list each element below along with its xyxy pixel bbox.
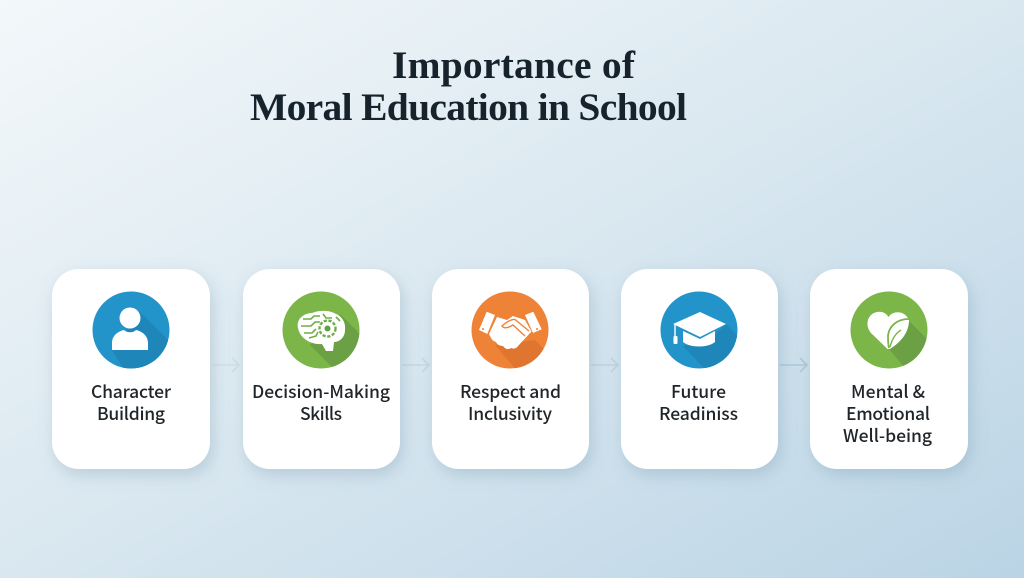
icon: graduation cap (660, 292, 738, 368)
title (250, 43, 687, 129)
title: Importance of (392, 43, 636, 87)
panel: character building (52, 269, 210, 469)
label: decision-making skills: Decision-Making (252, 379, 390, 404)
label: future readiness: Future (671, 379, 726, 404)
label: character building: Character (91, 379, 172, 404)
label: respect and inclusivity (460, 379, 561, 426)
label: mental and emotional well-being (843, 379, 932, 448)
panel: mental and emotional well-being (810, 269, 968, 469)
icon: heart with leaf (850, 292, 928, 368)
arrow: step 1 to 2 (213, 358, 239, 372)
panel: decision-making skills (243, 269, 400, 469)
label: mental and emotional well-being: Emotional (846, 401, 930, 426)
arrow: step 3 to 4 (591, 358, 618, 372)
icon: brain with gear (282, 292, 360, 368)
label: character building: Building (97, 401, 165, 426)
label: decision-making skills: Skills (300, 401, 342, 426)
label: mental and emotional well-being: Mental & (851, 379, 926, 404)
label: decision-making skills (252, 379, 390, 426)
panel: respect and inclusivity (432, 269, 589, 469)
title: Moral Education in School (250, 85, 687, 129)
panel: future readiness (621, 269, 778, 469)
arrow: step 4 to 5 (780, 358, 807, 372)
icon: handshake (472, 292, 548, 368)
label: mental and emotional well-being: Well-being (843, 423, 932, 448)
label: future readiness: Readiniss (659, 401, 738, 426)
label: character building (91, 379, 172, 426)
label: respect and inclusivity: Inclusivity (468, 401, 552, 426)
label: respect and inclusivity: Respect and (460, 379, 561, 404)
label: future readiness (659, 379, 738, 426)
arrow: step 2 to 3 (402, 358, 429, 372)
icon: person (92, 292, 170, 368)
